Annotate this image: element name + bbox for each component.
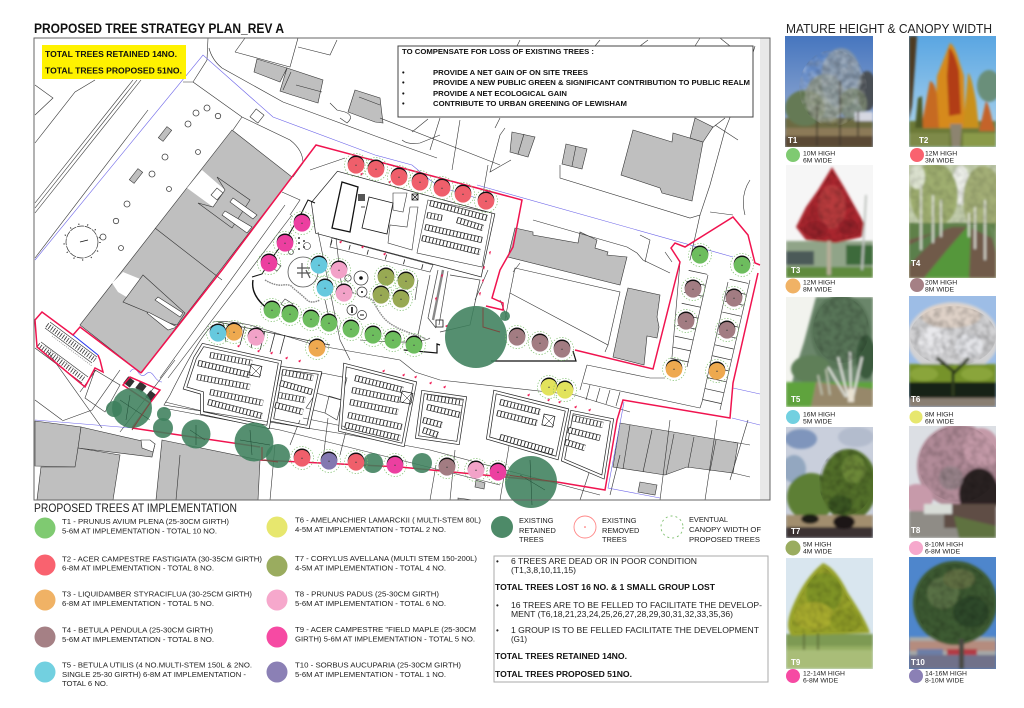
T3 entry <box>34 590 252 610</box>
T3 entry: T3 - LIQUIDAMBER STYRACIFLUA (30-25CM GIRTH) <box>62 590 252 598</box>
panel: tree loss notes <box>494 556 768 682</box>
key: existing retained: RETAINED <box>519 526 556 535</box>
T5 entry: TOTAL 6 NO. <box>62 679 108 688</box>
parking courts <box>185 203 612 477</box>
key: existing removed: REMOVED <box>602 526 639 535</box>
plan frame <box>34 38 770 500</box>
label: T3 <box>791 266 801 275</box>
proposed trees: T10 purple <box>318 450 340 472</box>
photo T4 <box>909 165 996 278</box>
photo T10 <box>909 557 996 669</box>
caption T3: 8M WIDE <box>803 286 833 294</box>
panel: tree loss notes: (T1,3,8,10,11,15) <box>511 566 576 575</box>
key: existing retained <box>491 516 556 544</box>
photo T6 <box>909 296 996 407</box>
caption T4: 20M HIGH <box>925 280 957 286</box>
caption T1: 6M WIDE <box>803 158 833 164</box>
caption T3 <box>786 278 835 294</box>
T4 entry: T4 - BETULA PENDULA (25-30CM GIRTH) <box>62 626 213 634</box>
T6 entry: 4-5M AT IMPLEMENTATION - TOTAL 2 NO. <box>295 525 446 534</box>
caption T6: 8M HIGH <box>925 412 953 418</box>
central courtyard and play area <box>252 173 576 361</box>
key: existing removed: EXISTING <box>602 516 637 525</box>
callout: compensation measures <box>398 46 753 117</box>
caption T8 <box>909 541 963 556</box>
caption T10 <box>909 669 967 684</box>
callout: compensation measures: PROVIDE A NET GAIN OF ON SITE TREES <box>433 68 588 77</box>
caption T5 <box>786 410 835 426</box>
label: T1 <box>788 136 798 145</box>
caption T5: 5M WIDE <box>803 418 833 426</box>
label: T4 <box>911 259 921 268</box>
residential parking ladders, right <box>679 272 739 406</box>
key: existing removed <box>574 516 639 544</box>
caption T4 <box>910 278 957 294</box>
caption T2: 12M HIGH <box>925 150 957 158</box>
panel: tree loss notes: TOTAL TREES RETAINED 14NO. <box>495 652 627 661</box>
T5 entry: T5 - BETULA UTILIS (4 NO.MULTI-STEM 150L & 2NO. <box>62 660 252 670</box>
caption T9: 12-14M HIGH <box>803 670 845 678</box>
T7 entry: T7 - CORYLUS AVELLANA (MULTI STEM 150-200L) <box>295 554 477 563</box>
T1 entry: 5-6M AT IMPLEMENTATION - TOTAL 10 NO. <box>62 526 217 536</box>
title: PROPOSED TREE STRATEGY PLAN_REV A <box>34 21 284 36</box>
label: T6 <box>911 395 921 404</box>
caption T4: 8M WIDE <box>925 286 955 294</box>
caption T7: 5M HIGH <box>803 542 831 548</box>
scalloped tree canopy symbol <box>64 224 100 260</box>
callout: compensation measures: TO COMPENSATE FOR LOSS OF EXISTING TREES : <box>402 47 594 56</box>
panel: tree loss notes: • <box>496 626 499 635</box>
T8 entry: T8 - PRUNUS PADUS (25-30CM GIRTH) <box>295 590 439 598</box>
photo T9 <box>786 558 873 669</box>
caption T1: 10M HIGH <box>803 150 835 158</box>
label: T10 <box>911 658 925 667</box>
ownership boundary (blue) <box>35 55 760 498</box>
caption T8: 8-10M HIGH <box>925 542 963 548</box>
T5 entry <box>34 660 252 688</box>
key: existing removed: TREES <box>602 535 627 544</box>
caption T6 <box>910 410 955 426</box>
proposed trees: T6 yellow <box>538 376 576 402</box>
caption T3: 12M HIGH <box>803 280 835 286</box>
caption T9: 6-8M WIDE <box>803 678 839 684</box>
panel: tree loss notes: • <box>496 557 499 566</box>
callout: totals (yellow): TOTAL TREES PROPOSED 51NO. <box>45 66 182 76</box>
key: eventual canopy <box>661 515 761 544</box>
key: existing retained: TREES <box>519 535 544 544</box>
proposed trees: T8 pink <box>244 258 488 482</box>
T9 entry <box>266 625 476 648</box>
callout: compensation measures: • <box>402 89 405 98</box>
panel: tree loss notes: (G1) <box>511 635 527 644</box>
T4 entry: 5-6M AT IMPLEMENTATION - TOTAL 8 NO. <box>62 635 214 644</box>
photo T7 <box>786 427 873 538</box>
panel: tree loss notes: TOTAL TREES PROPOSED 51NO. <box>495 670 632 679</box>
caption T2: 3M WIDE <box>925 158 955 164</box>
panel: tree loss notes: 6 TREES ARE DEAD OR IN POOR CONDITION <box>511 557 697 566</box>
T6 entry <box>266 516 481 538</box>
legend: tree status key <box>491 515 761 544</box>
T3 entry: 6-8M AT IMPLEMENTATION - TOTAL 5 NO. <box>62 599 214 608</box>
callout: compensation measures: PROVIDE A NET ECOLOGICAL GAIN <box>433 89 567 98</box>
label: T7 <box>791 527 801 536</box>
caption T7: 4M WIDE <box>803 548 833 556</box>
small retained trees in the green <box>100 105 221 250</box>
callout: compensation measures: PROVIDE A NEW PUBLIC GREEN & SIGNIFICANT CONTRIBUTION TO PUBLIC REALM <box>433 78 750 87</box>
callout: compensation measures: CONTRIBUTE TO URBAN GREENING OF LEWISHAM <box>433 99 627 108</box>
callout: compensation measures: • <box>402 78 405 87</box>
callout: compensation measures: • <box>402 99 405 108</box>
photo T3 <box>786 165 873 278</box>
label: T5 <box>791 395 801 404</box>
caption T2 <box>910 148 957 164</box>
key: eventual canopy: EVENTUAL <box>689 515 728 524</box>
key: existing retained: EXISTING <box>519 516 554 525</box>
callout: totals (yellow) <box>42 45 186 79</box>
T2 entry <box>34 554 262 576</box>
T8 entry: 5-6M AT IMPLEMENTATION - TOTAL 6 NO. <box>295 599 446 608</box>
photo T8 <box>909 426 996 538</box>
T5 entry: SINGLE 25-30 GIRTH) 6-8M AT IMPLEMENTATION - <box>62 670 247 679</box>
buildings (grey blocks) <box>35 59 738 500</box>
caption T5: 16M HIGH <box>803 412 835 418</box>
proposed trees: T1 green <box>260 244 754 356</box>
T8 entry <box>266 590 446 610</box>
T9 entry: T9 - ACER CAMPESTRE "FIELD MAPLE (25-30CM <box>295 625 476 634</box>
T1 entry: T1 - PRUNUS AVIUM PLENA (25-30CM GIRTH) <box>62 517 229 526</box>
photo T5 <box>786 297 873 407</box>
proposed trees: T9 magenta <box>258 212 510 484</box>
heading: mature height and canopy width: MATURE HEIGHT & CANOPY WIDTH <box>786 21 992 36</box>
T10 entry: 5-6M AT IMPLEMENTATION - TOTAL 1 NO. <box>295 670 446 679</box>
roads and site linework <box>35 38 755 500</box>
photo T1 <box>785 36 873 147</box>
callout: totals (yellow): TOTAL TREES RETAINED 14NO. <box>45 50 177 59</box>
panel: tree loss notes: 1 GROUP IS TO BE FELLED FACILITATE THE DEVELOPMENT <box>511 626 759 635</box>
caption T10: 8-10M WIDE <box>925 678 964 684</box>
detached car park, lower left <box>35 322 157 402</box>
label: T9 <box>791 658 801 667</box>
T9 entry: GIRTH) 5-6M AT IMPLEMENTATION - TOTAL 5 NO. <box>295 634 475 644</box>
proposed trees: T2 red <box>290 154 498 474</box>
legend: proposed tree species <box>34 516 481 688</box>
key: eventual canopy: CANOPY WIDTH OF <box>689 525 761 534</box>
caption T6: 6M WIDE <box>925 418 955 426</box>
proposed trees: T3 orange <box>222 320 728 382</box>
T10 entry <box>266 660 461 682</box>
caption T10: 14-16M HIGH <box>925 670 967 678</box>
T4 entry <box>34 626 214 648</box>
T2 entry: T2 - ACER CAMPESTRE FASTIGIATA (30-35CM GIRTH) <box>62 554 262 564</box>
label: T8 <box>911 526 921 535</box>
proposed trees: T7 olive <box>370 266 418 310</box>
T7 entry: 4-5M AT IMPLEMENTATION - TOTAL 4 NO. <box>295 564 446 572</box>
T2 entry: 6-8M AT IMPLEMENTATION - TOTAL 8 NO. <box>62 564 214 572</box>
proposed trees: T5 blue <box>206 254 336 344</box>
panel: tree loss notes: MENT (T6,18,21,23,24,25,26,27,28,29,30,31,32,33,35,36) <box>511 610 733 619</box>
existing retained trees <box>106 306 557 508</box>
caption T1 <box>786 148 835 164</box>
label: T2 <box>919 136 929 145</box>
legend heading: PROPOSED TREES AT IMPLEMENTATION <box>34 501 237 515</box>
caption T8: 6-8M WIDE <box>925 548 961 556</box>
caption T9 <box>786 669 845 684</box>
panel: tree loss notes: • <box>496 601 499 610</box>
site boundary (red) <box>35 145 760 490</box>
T10 entry: T10 - SORBUS AUCUPARIA (25-30CM GIRTH) <box>295 660 461 670</box>
caption T7 <box>786 540 833 556</box>
T1 entry <box>34 517 229 538</box>
T6 entry: T6 - AMELANCHIER LAMARCKII ( MULTI-STEM 80L) <box>295 516 481 524</box>
callout: compensation measures: • <box>402 68 405 77</box>
panel: site plan <box>34 38 770 508</box>
panel: tree loss notes: TOTAL TREES LOST 16 NO. & 1 SMALL GROUP LOST <box>495 583 715 592</box>
existing removed tree markers (red triangles) <box>237 172 591 412</box>
photo T2 <box>909 36 996 147</box>
key: eventual canopy: PROPOSED TREES <box>689 535 760 544</box>
panel: tree loss notes: 16 TREES ARE TO BE FELLED TO FACILITATE THE DEVELOP- <box>511 601 762 610</box>
T7 entry <box>266 554 477 576</box>
proposed trees: T4 mauve <box>436 278 746 478</box>
